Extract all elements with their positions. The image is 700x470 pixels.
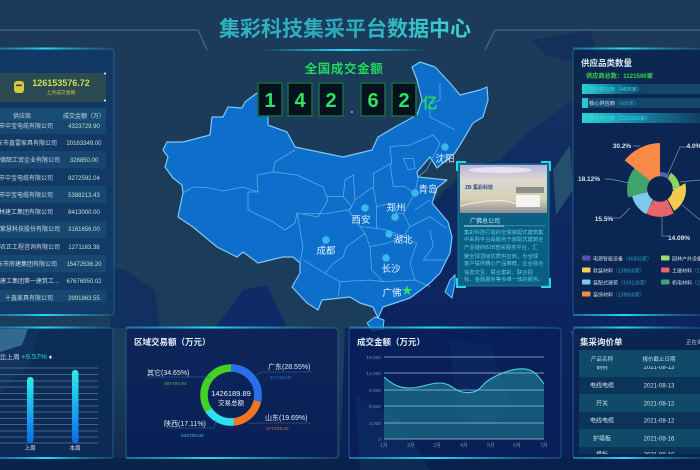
total turnover counter: . <box>350 100 354 116</box>
panel: turnover area chart <box>349 326 561 459</box>
table rows: 十鑫家具有限公司 <box>5 294 53 302</box>
company description <box>464 228 544 283</box>
area chart: 9,000 <box>369 388 381 394</box>
company description: 中采购平台是服务于装配式建筑全 <box>464 235 544 243</box>
table rows: 林建工集团有限公司 <box>0 208 53 216</box>
company description: 产业链的B2B查采服务平台，汇 <box>464 243 538 251</box>
panel: company info card <box>457 162 550 287</box>
area chart: 6月 <box>513 443 521 449</box>
donut centre total: 交易总额 <box>218 398 244 407</box>
table rows: 模板 <box>596 450 608 458</box>
area chart: 2月 <box>407 443 415 449</box>
title: 集彩科技集采平台数据中心 <box>219 17 471 41</box>
area chart: 7月 <box>540 443 548 449</box>
rose pie chart: 30.2% <box>613 143 631 150</box>
table rows: 67676950.02 <box>66 279 102 285</box>
turnover summary: 上月成交金额 <box>47 89 76 96</box>
table rows <box>579 366 700 454</box>
pie legend: 装饰材料（138658家） <box>593 292 645 298</box>
area chart: 15,000 <box>366 355 381 361</box>
panel heading: 区域交易额（万元） <box>134 337 211 347</box>
company description: 聚全球顶级优质供应商，为全球 <box>464 252 539 260</box>
donut callouts <box>147 362 312 439</box>
table rows: 2021-08-10 <box>644 452 675 458</box>
area chart: 4月 <box>460 443 468 449</box>
table header <box>579 350 700 366</box>
total turnover counter: 6 <box>367 90 379 112</box>
bar: last week <box>27 377 34 443</box>
supplier bars: 核心供应商（685家） <box>589 99 639 107</box>
table header: 成交金额（万） <box>63 112 105 120</box>
panel: procurement inquiry list <box>573 326 700 459</box>
bar: this week <box>72 370 78 443</box>
turnover summary <box>0 72 106 102</box>
pie legend: 机电材料（2 <box>672 280 700 286</box>
panel: supplier category count <box>573 48 700 316</box>
area chart: 0 <box>378 437 381 443</box>
table rows: 15472536.20 <box>66 262 102 268</box>
table rows: 电线电缆 <box>590 416 614 424</box>
table header: 报价截止日期 <box>642 355 676 363</box>
panel heading: 供应品类数量 <box>581 58 633 68</box>
pie legend <box>582 256 700 298</box>
table header: 产品名称 <box>591 355 613 363</box>
table rows: 3991863.55 <box>68 296 101 302</box>
donut callouts: 240700.00 <box>181 433 204 439</box>
map city markers <box>316 143 455 299</box>
table rows: 农正工程咨询有限公司 <box>0 243 60 251</box>
supplier bars: 潜在供应商（1121590家） <box>589 114 650 122</box>
table rows: 建工集团第一建筑工... <box>0 277 59 285</box>
donut callouts: 陕西(17.11%) <box>164 419 206 428</box>
table rows: 20163349.00 <box>66 141 102 147</box>
map of China <box>163 62 488 331</box>
total turnover counter: 2 <box>398 90 410 112</box>
table rows: 8413000.00 <box>68 210 101 216</box>
table rows: 钢材 <box>596 363 608 371</box>
panel: weekly comparison bars <box>0 326 114 459</box>
donut callouts: 山东(19.69%) <box>265 413 307 422</box>
table rows: 电线电缆 <box>590 382 614 390</box>
table header: 供应商 <box>13 112 31 120</box>
table rows: 9272592.04 <box>68 176 101 182</box>
area chart: 12,000 <box>366 371 381 377</box>
turnover summary: 126153576.72 <box>32 78 90 88</box>
total turnover counter: 2 <box>325 90 337 112</box>
table rows: 2021-08-13 <box>644 365 675 371</box>
panel: monthly supplier turnover table <box>0 48 114 316</box>
area chart: 3月 <box>433 443 441 449</box>
title <box>0 17 700 51</box>
bar labels: 上周 <box>24 444 36 452</box>
supplier bars: 签约供应商（4435家） <box>589 85 642 93</box>
area chart: 6,000 <box>369 404 381 410</box>
donut callouts: 407162.00 <box>270 375 292 380</box>
map city markers: 西安 <box>351 214 371 226</box>
panel: regional transaction donut <box>126 326 338 459</box>
rose pie chart: 18.12% <box>578 176 600 183</box>
total turnover counter: 1 <box>264 90 276 112</box>
area chart: 3,000 <box>369 421 381 427</box>
company photo: ZB 集彩科技 <box>465 184 493 191</box>
table rows: 护墙板 <box>593 434 611 442</box>
rose pie chart: 15.5% <box>595 216 613 223</box>
donut callouts: 277129.02 <box>266 426 289 432</box>
table header <box>0 108 106 121</box>
panel heading: 集采询价单 <box>580 337 623 347</box>
table rows: 2021-08-12 <box>644 418 675 424</box>
map city markers: 青岛 <box>418 184 438 196</box>
area chart: 5月 <box>487 443 495 449</box>
rose pie chart <box>578 143 700 242</box>
pie legend: 土建材料（1 <box>672 268 700 274</box>
bar labels <box>24 444 81 452</box>
donut callouts: 广东(28.55%) <box>268 362 310 371</box>
company description: 集彩科技打造的全球装配式建筑集 <box>464 228 544 236</box>
table rows: 2021-08-12 <box>644 402 675 408</box>
area chart: 1月 <box>380 443 388 449</box>
company description: 客户提供精心产品推荐、企业综合 <box>464 259 544 267</box>
pie legend: 电源智能设备（45833家） <box>593 256 652 262</box>
pie legend: 装配式建筑（169128家） <box>593 280 650 286</box>
table rows: 5388213.43 <box>68 193 101 199</box>
total turnover counter <box>258 61 438 116</box>
total turnover counter: 亿 <box>422 95 438 112</box>
total turnover counter: 全国成交金额 <box>305 61 383 76</box>
company description: 标、金融服务等多维一体的服务。 <box>464 275 543 283</box>
panel: company info card: 广佛总公司 <box>470 217 500 225</box>
donut callouts: 487494.94 <box>164 381 187 387</box>
donut chart <box>204 368 258 422</box>
supplier total: 供应商总数：1121590家 <box>586 72 654 80</box>
table rows: 1271163.38 <box>68 245 100 251</box>
donut centre total: 1426189.89 <box>211 389 251 398</box>
total turnover counter: 4 <box>294 90 306 112</box>
panel heading: 成交金额（万元） <box>357 337 425 347</box>
area chart <box>366 355 548 449</box>
table rows <box>0 117 106 307</box>
map city markers: 湖北 <box>393 235 413 246</box>
company description: 信息交互、联合集彩、联合招 <box>464 268 533 276</box>
table rows: 开关 <box>596 400 608 408</box>
week comparison label: 比上周 +9.57% ♦ <box>0 352 53 361</box>
table rows: 2021-08-16 <box>644 436 675 442</box>
table rows: 4323729.90 <box>68 124 101 130</box>
pie legend: 软装材料（138658家） <box>593 268 645 274</box>
donut centre total <box>211 389 251 407</box>
table rows: 3161656.00 <box>68 227 101 233</box>
bar labels: 本周 <box>69 444 81 452</box>
donut callouts: 其它(34.65%) <box>147 368 189 377</box>
map city markers: 成都 <box>316 245 336 257</box>
map city markers: 广佛 <box>382 287 402 299</box>
map city markers: 沈阳 <box>435 153 455 165</box>
table rows: 2021-08-13 <box>644 384 675 390</box>
map city markers: ★ <box>402 285 412 297</box>
supplier bars <box>582 84 700 123</box>
map city markers: 郑州 <box>386 202 406 214</box>
rose pie chart: 14.09% <box>668 235 690 242</box>
table rows: 紫慧科技股份有限公司 <box>0 225 60 233</box>
table rows: 328850.00 <box>70 158 99 164</box>
map city markers: 长沙 <box>381 263 401 275</box>
